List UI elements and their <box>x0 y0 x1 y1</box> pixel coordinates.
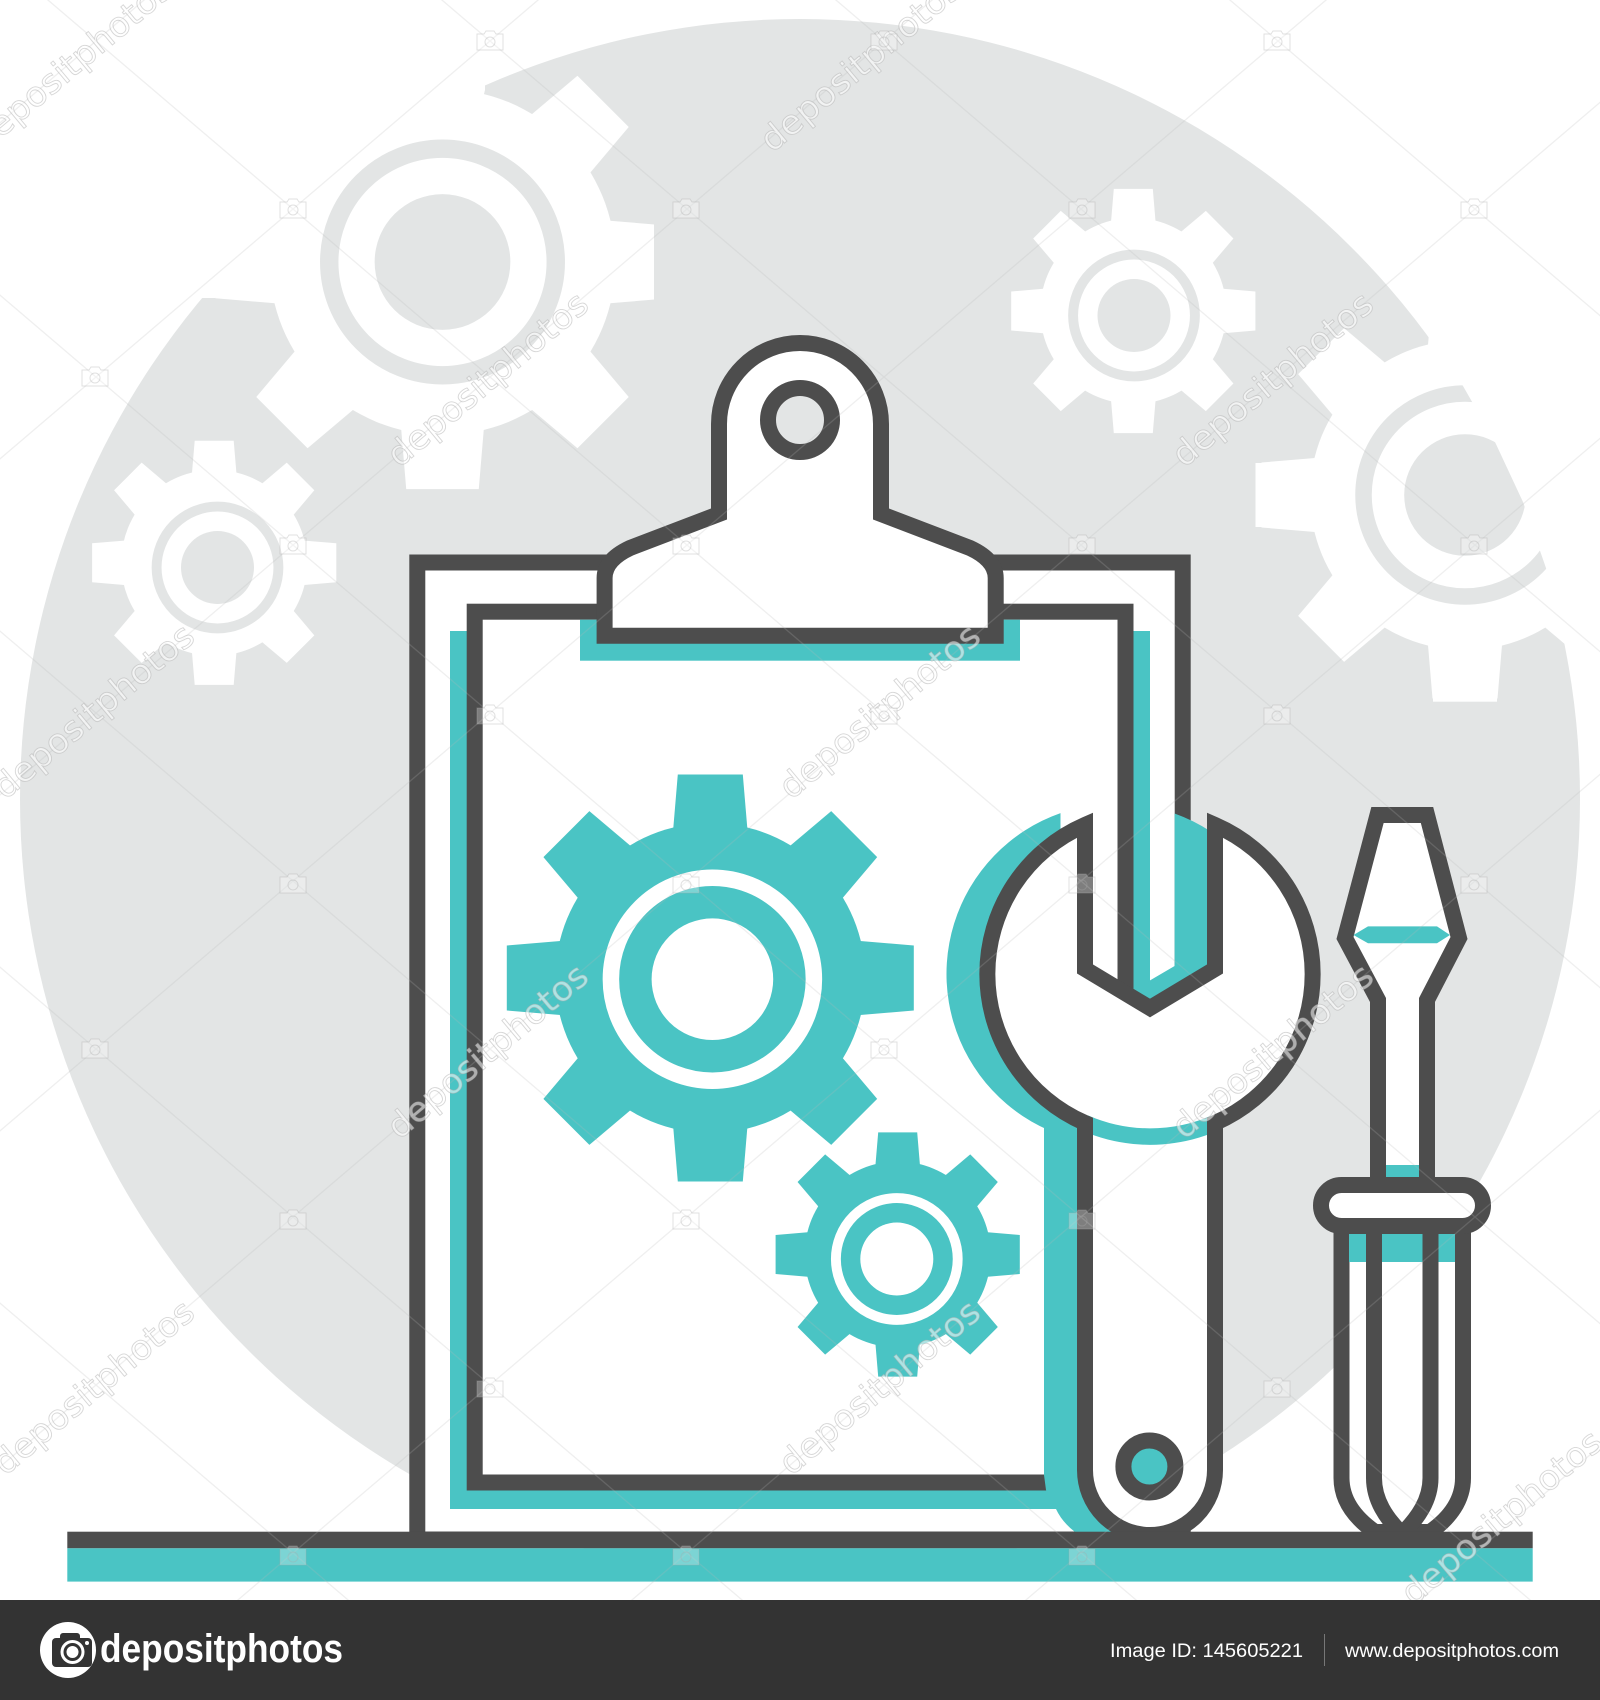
gear: large white right <box>1256 292 1600 702</box>
gear: small white top-right <box>1011 189 1255 433</box>
wrench teal shadow <box>946 813 1287 1532</box>
paper teal offset shadow <box>450 631 1150 1509</box>
clipboard <box>417 343 1183 1540</box>
watermark: repeated text and camera marks: depositphotos <box>1164 956 1382 1147</box>
wrench handle hole <box>1123 1440 1175 1492</box>
gear: small white left <box>92 441 336 685</box>
wrench <box>946 813 1313 1535</box>
clip teal shadow <box>580 620 1020 661</box>
gear: small teal on paper <box>776 1132 1020 1377</box>
shelf line <box>67 1532 1533 1582</box>
gear: large white top-left <box>215 35 670 489</box>
screwdriver handle <box>1342 1230 1463 1532</box>
clipboard board <box>417 562 1183 1540</box>
blade teal highlight <box>1354 926 1450 943</box>
screwdriver <box>1321 815 1483 1534</box>
metal clip <box>605 343 996 636</box>
image id: Image ID: 145605221 <box>1110 1641 1303 1662</box>
paper sheet <box>475 612 1126 1482</box>
footer bar <box>0 1600 1600 1700</box>
wrench outline <box>987 825 1313 1535</box>
clip hole <box>768 388 832 452</box>
watermark: repeated text and camera marks: depositphotos <box>771 616 989 807</box>
watermark: repeated text and camera marks: depositphotos <box>379 284 597 475</box>
icon: camera logo <box>40 1622 96 1678</box>
watermark: repeated text and camera marks: depositphotos <box>771 1292 989 1483</box>
screwdriver blade <box>1345 815 1459 1178</box>
watermark: repeated text and camera marks: depositphotos <box>379 956 597 1147</box>
screwdriver collar <box>1321 1185 1483 1226</box>
gear: large teal on paper <box>507 774 914 1182</box>
logo wordmark: depositphotos <box>100 1627 343 1671</box>
watermark: repeated text and camera marks: depositphotos <box>1393 1422 1600 1613</box>
watermark: repeated text and camera marks: depositphotos <box>1164 284 1382 475</box>
website url: www.depositphotos.com <box>1344 1641 1559 1662</box>
